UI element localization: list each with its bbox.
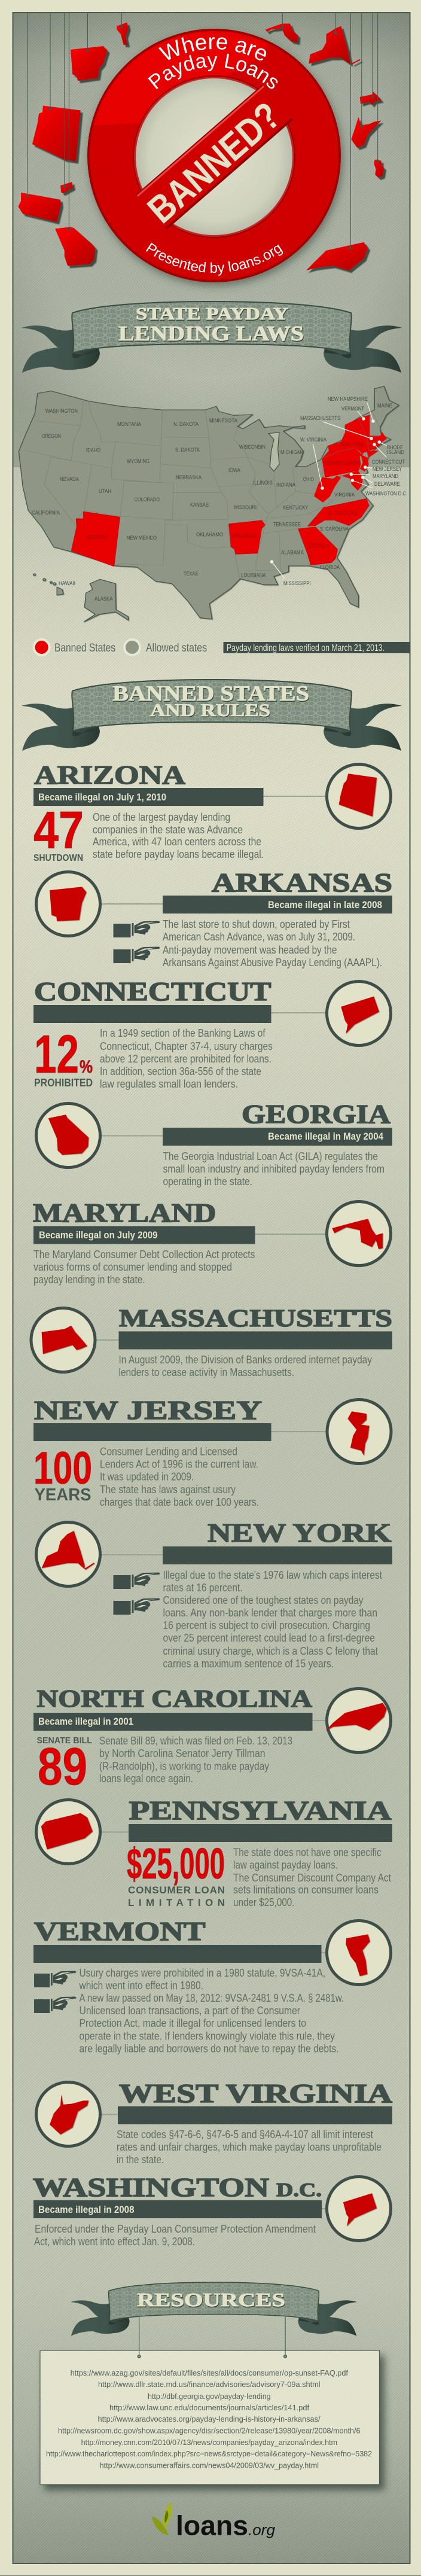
map state labels: HAWAII: [59, 580, 75, 587]
map state labels: INDIANA: [276, 482, 296, 488]
North Carolina date bar: Became illegal in 2001: [38, 1716, 133, 1727]
legend: allowed states: Allowed states: [146, 642, 207, 654]
Arkansas description: Anti-payday movement was headed by the: [163, 944, 337, 956]
Connecticut description: In addition, section 36a-556 of the state: [100, 1065, 261, 1077]
banner heading text: [112, 681, 309, 720]
Maryland description: [33, 1249, 255, 1286]
West Virginia bar: [118, 2106, 392, 2124]
Connecticut title: CONNECTICUT: [34, 977, 271, 1006]
North Carolina title: NORTH CAROLINA: [37, 1685, 312, 1712]
sign diagonal bar: [136, 84, 293, 230]
card source links: http://www.thecharlottepost.com/index.php?src=news&srctype=detail&category=News&refno=5382: [46, 2450, 372, 2458]
Washington D.C. date bar: [33, 2200, 322, 2218]
Washington D.C. description: Act, which went into effect Jan. 9, 2008.: [34, 2236, 195, 2248]
section: Washington D.C.: [33, 2173, 391, 2248]
Pennsylvania connector and badge: [36, 1799, 129, 1864]
New Jersey stat 100 years: YEARS: [35, 1485, 91, 1505]
banner heading text: [118, 305, 304, 345]
Georgia description: operating in the state.: [163, 1176, 252, 1187]
map state labels: ALABAMA: [281, 549, 304, 556]
map state labels: N. DAKOTA: [173, 421, 199, 428]
Arkansas connector and badge: [36, 872, 163, 936]
map state labels: OREGON: [42, 433, 61, 440]
Connecticut bar: [33, 1005, 271, 1023]
Vermont description: A new law passed on May 18, 2012: 9VSA-2481 9 V.S.A. § 2481w.: [79, 1992, 344, 2004]
Arkansas date bar: [163, 896, 392, 914]
New Jersey description: [100, 1445, 259, 1508]
Maryland description: various forms of consumer lending and stopped: [33, 1261, 232, 1273]
Arkansas date bar: Became illegal in late 2008: [268, 899, 382, 911]
New York bar: [163, 1546, 392, 1564]
Connecticut stat 12 percent: %: [80, 1057, 93, 1077]
map legend: [33, 638, 410, 656]
Washington D.C. description: [34, 2223, 316, 2248]
New Jersey description: It was updated in 2009.: [100, 1470, 194, 1482]
section: West Virginia: [36, 2079, 392, 2166]
Washington D.C. date bar: Became illegal in 2008: [38, 2204, 134, 2215]
New York description: loans. Any non-bank lender that charges more than: [163, 1607, 377, 1619]
map state labels: RHODE: [387, 444, 403, 451]
West Virginia description: rates and unfair charges, which make payday loans unprofitable: [117, 2141, 382, 2153]
Pennsylvania stat 25000: $25,000: [127, 1840, 225, 1888]
banner: resources: [71, 2282, 357, 2336]
New Jersey description: Consumer Lending and Licensed: [100, 1445, 237, 1457]
map state labels: TENNESSEE: [273, 522, 301, 528]
section: Connecticut: [33, 977, 391, 1090]
map state labels: MISSISSIPPI: [283, 580, 311, 587]
map state labels: ISLAND: [387, 449, 404, 456]
Arkansas pointing hands: [114, 921, 160, 963]
map state labels: ILLINOIS: [253, 480, 273, 486]
Maryland connector and badge: [255, 1201, 391, 1266]
legend: banned states: Banned States: [54, 642, 115, 654]
New Jersey bar: [33, 1423, 271, 1441]
New York description: Considered one of the toughest states on payday: [163, 1594, 364, 1606]
West Virginia description: [117, 2129, 382, 2166]
New York description: rates at 16 percent.: [163, 1582, 243, 1594]
Vermont bar: [33, 1945, 322, 1963]
banner heading text: AND RULES: [150, 701, 270, 720]
map state labels: NEBRASKA: [176, 474, 202, 481]
northeast banned states: [314, 415, 387, 503]
Washington D.C. title: [33, 2173, 322, 2202]
New York description: [163, 1569, 382, 1670]
sign word: banned: BANNED?: [139, 94, 288, 232]
Georgia date bar: [163, 1128, 392, 1146]
section: Maryland: [33, 1198, 391, 1286]
New York connector and badge: [36, 1522, 163, 1587]
map state labels: PENNSYLVANIA: [324, 460, 361, 467]
Vermont description: Unlicensed loan transactions, a part of the Consumer: [79, 2005, 300, 2017]
map state labels: CALIFORNIA: [32, 510, 60, 516]
map state labels: MAINE: [377, 403, 392, 409]
Vermont description: Usury charges were prohibited in a 1980 statute, 9VSA-41A,: [79, 1967, 325, 1979]
section: New York: [36, 1518, 392, 1670]
map state labels: NEW YORK: [340, 441, 365, 448]
card source links: https://www.azag.gov/sites/default/files/sites/all/docs/consumer/op-sunset-FAQ.pdf: [71, 2369, 349, 2377]
card source links: [46, 2369, 372, 2470]
map state labels: COLORADO: [134, 497, 160, 503]
hanging strings: [26, 13, 379, 249]
Arizona date bar: Became illegal on July 1, 2010: [38, 791, 166, 803]
New Jersey stat 100 years: [33, 1443, 92, 1505]
map state labels: OHIO: [303, 476, 314, 483]
banner heading text: BANNED STATES: [112, 681, 309, 705]
West Virginia connector and badge: [36, 2082, 118, 2146]
card source links: http://www.aradvocates.org/payday-lending-is-history-in-arkansas/: [98, 2415, 321, 2423]
map state labels: N. CAROLINA: [328, 510, 358, 517]
Pennsylvania stat 25000: [127, 1840, 225, 1908]
Georgia title: GEORGIA: [242, 1100, 391, 1129]
map state labels: KENTUCKY: [283, 505, 309, 511]
map state labels: MASSACHUSETTS: [300, 415, 340, 422]
section: Pennsylvania: [36, 1796, 392, 1908]
US map: [19, 386, 406, 622]
Arizona description: state before payday loans became illegal.: [93, 848, 264, 860]
North Carolina description: loans legal once again.: [99, 1773, 193, 1785]
map state labels: ALASKA: [94, 596, 113, 602]
New Jersey description: Lenders Act of 1996 is the current law.: [100, 1458, 258, 1470]
New Jersey stat 100 years: 100: [33, 1443, 92, 1494]
Arizona connector and badge: [263, 765, 391, 828]
banner heading text: LENDING LAWS: [118, 322, 304, 345]
New York description: criminal usury charge, which is a Class C felony that: [163, 1645, 378, 1657]
map state labels: FLORIDA: [320, 564, 340, 571]
sign heading: payday loans: Payday Loans: [148, 54, 277, 90]
banner heading text: RESOURCES: [137, 2289, 285, 2310]
Connecticut description: law regulates small loan lenders.: [100, 1078, 238, 1090]
map land and borders: [19, 386, 399, 622]
New Jersey connector and badge: [271, 1400, 391, 1463]
Arkansas description: The last store to shut down, operated by First: [163, 918, 350, 930]
Arizona date bar: [33, 788, 263, 806]
legend: allowed states: [123, 638, 207, 656]
map state labels: WASHINGTON D.C: [365, 491, 406, 497]
map state labels: OKLAHAMO: [196, 531, 223, 538]
banner: banned states and rules: [22, 680, 402, 751]
New Jersey description: charges that date back over 100 years.: [100, 1496, 259, 1508]
West Virginia title: WEST VIRGINIA: [119, 2079, 392, 2108]
card source links: http://www.dllr.state.md.us/finance/advisories/advisory7-09a.shtml: [98, 2380, 321, 2389]
section: Arkansas: [36, 868, 392, 969]
Connecticut stat 12 percent: 12: [34, 1025, 79, 1085]
New York description: carries a maximum sentence of 15 years.: [163, 1658, 334, 1670]
map state labels: [32, 396, 406, 602]
banner: state payday lending laws: [22, 302, 402, 373]
section: Georgia: [36, 1100, 392, 1187]
map state labels: NEW JERSEY: [373, 466, 402, 473]
Maryland title: MARYLAND: [33, 1198, 216, 1228]
Arizona description: One of the largest payday lending: [93, 811, 230, 823]
Pennsylvania bar: [129, 1824, 392, 1842]
section: Vermont: [33, 1917, 391, 2054]
Arizona stat 47: 47: [33, 800, 84, 860]
loans.org logo: [152, 2502, 275, 2541]
map state labels: UTAH: [99, 488, 111, 495]
New York pointing hands: [114, 1572, 160, 1615]
Massachusetts bar: [118, 1332, 392, 1350]
card hanging strings: [138, 2317, 287, 2358]
Georgia date bar: Became illegal in May 2004: [268, 1131, 383, 1142]
Arkansas description: Arkansans Against Abusive Payday Lending (AAAPL).: [163, 957, 382, 969]
banner heading text: STATE PAYDAY: [136, 305, 288, 324]
Washington D.C. title: WASHINGTON: [33, 2173, 269, 2202]
Vermont connector and badge: [321, 1920, 391, 1985]
Arkansas description: [163, 918, 382, 969]
map state labels: S. DAKOTA: [175, 447, 200, 453]
New Jersey title: NEW JERSEY: [34, 1396, 262, 1425]
Connecticut description: In a 1949 section of the Banking Laws of: [100, 1027, 266, 1039]
map state labels: WYOMING: [127, 458, 150, 465]
map state labels: CONNECTICUT: [372, 459, 405, 465]
map state labels: MINNESOTA: [209, 418, 238, 424]
Georgia description: small loan industry and inhibited payday lenders from: [163, 1163, 385, 1175]
Pennsylvania description: The Consumer Discount Company Act: [233, 1872, 391, 1884]
Arizona description: [93, 811, 264, 860]
card source links: http://www.law.unc.edu/documents/journals/articles/141.pdf: [109, 2404, 310, 2412]
map state labels: NEW HAMPSHIRE: [328, 396, 368, 403]
Massachusetts description: lenders to cease activity in Massachusetts.: [118, 1366, 294, 1378]
map state labels: S. CAROLINA: [320, 526, 349, 532]
Washington D.C. connector and badge: [321, 2176, 391, 2241]
West Virginia description: in the state.: [117, 2154, 164, 2166]
Pennsylvania description: [233, 1846, 391, 1908]
Vermont description: operate in the state. If lenders knowingly violate this rule, they: [79, 2030, 335, 2042]
North Carolina description: (R-Randolph), is working to make payday: [99, 1760, 269, 1772]
Connecticut description: above 12 percent are prohibited for loans.: [100, 1053, 271, 1065]
logo wordmark: loans: [176, 2510, 248, 2541]
map state labels: VERMONT: [341, 406, 364, 412]
sign heading: where are: [158, 37, 267, 61]
map leader lines: [270, 403, 387, 578]
map state labels: MISSOURI: [234, 504, 257, 511]
map state labels: ARKANSAS: [232, 533, 257, 540]
map state labels: VIRGINIA: [334, 492, 355, 498]
New Jersey description: The state has laws against usury: [100, 1484, 236, 1496]
North Carolina date bar: [33, 1713, 312, 1731]
Arkansas description: American Cash Advance, was on July 31, 2009.: [163, 931, 355, 943]
Maryland description: payday lending in the state.: [33, 1274, 145, 1286]
Arizona description: companies in the state was Advance: [93, 824, 243, 836]
card source links: http://www.consumeraffairs.com/news04/2009/03/wv_payday.html: [100, 2461, 319, 2470]
Vermont description: [79, 1967, 344, 2054]
map state labels: DELAWARE: [374, 481, 400, 488]
New York description: Illegal due to the state's 1976 law which caps interest: [163, 1569, 382, 1581]
Pennsylvania description: sets limitations on consumer loans: [233, 1884, 379, 1896]
map state labels: MICHIGAN: [280, 449, 303, 456]
logo wordmark: .org: [248, 2522, 275, 2539]
Connecticut description: Connecticut, Chapter 37-4, usury charges: [100, 1040, 273, 1052]
section: Massachusetts: [31, 1304, 392, 1378]
sign ring: [60, 12, 341, 282]
map state labels: KANSAS: [190, 502, 209, 508]
Arizona title: ARIZONA: [34, 760, 185, 790]
map state labels: MONTANA: [117, 421, 142, 428]
hero prohibition sign: [84, 28, 348, 291]
Pennsylvania stat 25000: CONSUMER LOAN: [128, 1884, 225, 1896]
legend: banned states: [33, 638, 115, 656]
Georgia connector and badge: [36, 1103, 163, 1168]
New York description: over 25 percent interest could lead to a first-degree: [163, 1632, 375, 1644]
map state labels: MARYLAND: [373, 473, 398, 480]
card source links: http://dbf.georgia.gov/payday-lending: [148, 2392, 271, 2401]
Vermont description: which went into effect in 1980.: [79, 1980, 203, 1992]
Pennsylvania stat 25000: LIMITATION: [128, 1897, 225, 1908]
section: Arizona: [33, 760, 391, 863]
map state labels: WISCONSIN: [239, 444, 266, 450]
map state labels: IOWA: [228, 467, 241, 474]
section: New Jersey: [33, 1396, 391, 1508]
Massachusetts description: [118, 1354, 372, 1378]
card background: [40, 2350, 379, 2484]
logo leaves: [152, 2502, 172, 2535]
New York description: 16 percent is subject to civil prosecution. Charging: [163, 1619, 370, 1631]
sign hole: [133, 75, 296, 239]
Washington D.C. title: D.C.: [276, 2179, 322, 2200]
North Carolina stat senate bill 89: SENATE BILL: [37, 1735, 92, 1746]
Vermont description: Protection Act, made it illegal for unlicensed lenders to: [79, 2017, 306, 2029]
section: North Carolina: [33, 1685, 391, 1796]
North Carolina description: Senate Bill 89, which was filed on Feb. 13, 2013: [99, 1735, 292, 1747]
sign presented by: Presented by loans.org: [146, 243, 283, 276]
Massachusetts description: In August 2009, the Division of Banks ordered internet payday: [118, 1354, 372, 1366]
Maryland date bar: Became illegal on July 2009: [39, 1229, 158, 1241]
hanging states red shapes: [19, 23, 384, 270]
Arkansas title: ARKANSAS: [212, 868, 392, 897]
map state labels: LOUISIANA: [241, 572, 266, 579]
Arizona description: America, with 47 loan centers across the: [93, 836, 261, 848]
map state labels: W. VIRGINIA: [300, 437, 327, 443]
card source links: http://money.cnn.com/2010/07/13/news/companies/payday_arizona/index.htm: [81, 2438, 337, 2447]
map state labels: ARIZONA: [86, 534, 108, 541]
map state labels: NEVADA: [60, 476, 80, 483]
North Carolina connector and badge: [312, 1688, 391, 1753]
North Carolina stat senate bill 89: 89: [38, 1737, 87, 1796]
Georgia description: The Georgia Industrial Loan Act (GILA) regulates the: [163, 1150, 378, 1162]
card source links: http://newsroom.dc.gov/show.aspx/agency/disr/section/2/release/13980/year/2008/month/6: [58, 2426, 361, 2435]
West Virginia description: State codes §47-6-6, §47-6-5 and §46A-4-107 all limit interest: [117, 2129, 373, 2140]
New York title: NEW YORK: [208, 1518, 391, 1548]
sign heading: where are: Where are: [158, 37, 267, 61]
Vermont pointing hands: [34, 1971, 77, 2013]
Pennsylvania description: The state does not have one specific: [233, 1846, 382, 1858]
resources card: [40, 2317, 379, 2484]
map state labels: TEXAS: [184, 571, 198, 577]
Massachusetts connector and badge: [31, 1308, 119, 1372]
Massachusetts title: MASSACHUSETTS: [119, 1304, 392, 1332]
Vermont description: are legally liable and borrowers do not have to repay the debts.: [79, 2042, 338, 2054]
map state labels: WASHINGTON: [45, 408, 78, 415]
map state labels: NEW MEXICO: [127, 535, 157, 541]
map state labels: IDAHO: [86, 447, 100, 453]
Maryland description: The Maryland Consumer Debt Collection Act protects: [33, 1249, 255, 1260]
hanging state cut-outs: [19, 13, 384, 270]
Connecticut stat 12 percent: PROHIBITED: [34, 1077, 93, 1089]
Georgia description: [163, 1150, 385, 1187]
map state labels: GEORGIA: [309, 543, 330, 549]
Connecticut connector and badge: [271, 981, 391, 1046]
North Carolina description: [99, 1735, 292, 1785]
Pennsylvania title: PENNSYLVANIA: [129, 1796, 392, 1825]
Pennsylvania description: law against payday loans.: [233, 1859, 338, 1871]
North Carolina description: by North Carolina Senator Jerry Tillman: [99, 1747, 266, 1759]
Arizona stat 47: SHUTDOWN: [33, 853, 83, 863]
Pennsylvania description: under $25,000.: [233, 1896, 294, 1908]
Connecticut description: [100, 1027, 273, 1090]
Maryland date bar: [33, 1226, 255, 1244]
Washington D.C. description: Enforced under the Payday Loan Consumer Protection Amendment: [35, 2223, 316, 2235]
Vermont title: VERMONT: [34, 1917, 206, 1946]
